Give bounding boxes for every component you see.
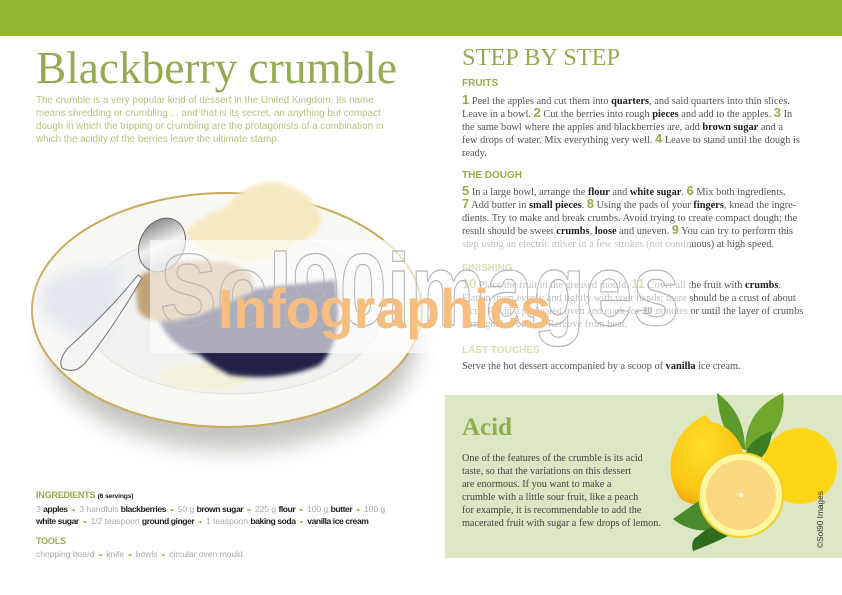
sauce — [160, 364, 250, 390]
acid text: for example, it is recommendable to add the — [462, 505, 641, 516]
top green band — [0, 0, 842, 36]
ingredients list: 3 apples ❧ 3 handfuls blackberries ❧ 50 g brown sugar ❧ 225 g flour ❧ 100 g butter ❧ 100 g — [36, 504, 385, 514]
photo: plate with blackberry crumble — [31, 180, 427, 462]
step by step heading: STEP BY STEP — [462, 44, 620, 71]
plate — [32, 193, 422, 427]
watermark: Infographics: Infographics — [218, 278, 551, 340]
steps 10 to 11: 2 cm. Put in a preheated oven and cook for 20 minutes or until the layer of crumbs — [462, 306, 803, 317]
panel: steps — [462, 78, 803, 372]
steps 1 to 4 — [462, 92, 800, 159]
watermark veil — [150, 240, 690, 353]
steps 1 to 4: Leave in a bowl. 2 Cut the berries into rough pieces and add to the apples. 3 In — [462, 105, 792, 120]
illustration: lemons and leaves — [670, 393, 837, 551]
acid text: One of the features of the crumble is its acid — [462, 453, 643, 464]
blackberries — [155, 280, 338, 377]
steps 5 to 9: 5 In a large bowl, arrange the flour and white sugar. 6 Mix both ingredients. — [462, 183, 786, 198]
photo credit: ©Sol90 Images — [815, 491, 825, 548]
acid text: macerated fruit with sugar a few drops of lemon. — [462, 518, 661, 529]
steps 5 to 9: step using an electric mixer in a few strokes (not continuous) at high speed. — [462, 239, 774, 250]
plate shadow — [47, 234, 417, 450]
acid text: taste, so that the variations on this dessert — [462, 466, 631, 477]
last step: Serve the hot dessert accompanied by a scoop of vanilla ice cream. — [462, 361, 741, 372]
heading: finishing: FINISHING — [462, 263, 513, 274]
watermark — [150, 233, 690, 353]
steps 1 to 4: 1 Peel the apples and cut them into quarters, and said quarters into thin slices. — [462, 92, 790, 107]
steps 1 to 4: ready. — [462, 148, 487, 159]
acid text: crumble with a little sour fruit, like a peach — [462, 492, 638, 503]
steps 5 to 9: result should be sweet crumbs, loose and uneven. 9 You can try to perform this — [462, 222, 793, 237]
intro text: which the acidity of the berries leave the ultimate stamp. — [36, 134, 279, 145]
steps 5 to 9: 7 Add butter in small pieces. 8 Using the pads of your fingers, knead the ingre- — [462, 196, 796, 211]
ingredients list — [36, 504, 385, 526]
acid heading: Acid — [462, 414, 512, 441]
heading: the dough: THE DOUGH — [462, 170, 522, 181]
heading: fruits: FRUITS — [462, 78, 498, 89]
steps 5 to 9 — [462, 183, 797, 250]
steps 10 to 11 — [462, 276, 803, 330]
ingredients list: white sugar ❧ 1/2 teaspoon ground ginger ❧ 1 teaspoon baking soda ❧ vanilla ice cream — [36, 516, 368, 526]
ingredients heading: INGREDIENTS (6 servings) — [36, 490, 133, 500]
spoon — [61, 210, 195, 370]
steps 10 to 11: turns golden brown. Remove from heat. — [462, 319, 627, 330]
intro text — [36, 95, 383, 145]
heading: last touches: LAST TOUCHES — [462, 345, 540, 356]
tools list: chopping board ❧ knife ❧ bowls ❧ circular oven mould — [36, 549, 243, 559]
ice cream — [185, 182, 322, 262]
intro text: The crumble is a very popular kind of dessert in the United Kingdom. Its name — [36, 95, 374, 106]
panel: acid — [445, 395, 842, 558]
steps 1 to 4: few drops of water. Mix everything very well. 4 Leave to stand until the dough is — [462, 131, 800, 146]
crumble — [135, 260, 253, 321]
tools heading: TOOLS — [36, 536, 66, 546]
steps 10 to 11: Flatten them evenly and lightly with your hands; there should be a crust of about — [462, 293, 796, 304]
title: Blackberry crumble — [36, 43, 397, 93]
steps 10 to 11: 10 Place the fruit in the greased mould. 11 Cover all the fruit with crumbs. — [462, 276, 781, 291]
intro text: dough in which the tripping or crumbling are the protagonists of a combination in — [36, 121, 383, 132]
acid text: are enormous. If you want to make a — [462, 479, 611, 490]
watermark: Sol90images: Sol90images — [160, 233, 680, 347]
acid text — [462, 453, 661, 529]
steps 5 to 9: dients. Try to make and break crumbs. Avoid trying to create compact dough; the — [462, 213, 797, 224]
steps 1 to 4: the same bowl where the apples and blackberries are, add brown sugar and a — [462, 122, 783, 133]
intro text: means shredding or crumbling ... and that is its secret, an anything but compact — [36, 108, 381, 119]
